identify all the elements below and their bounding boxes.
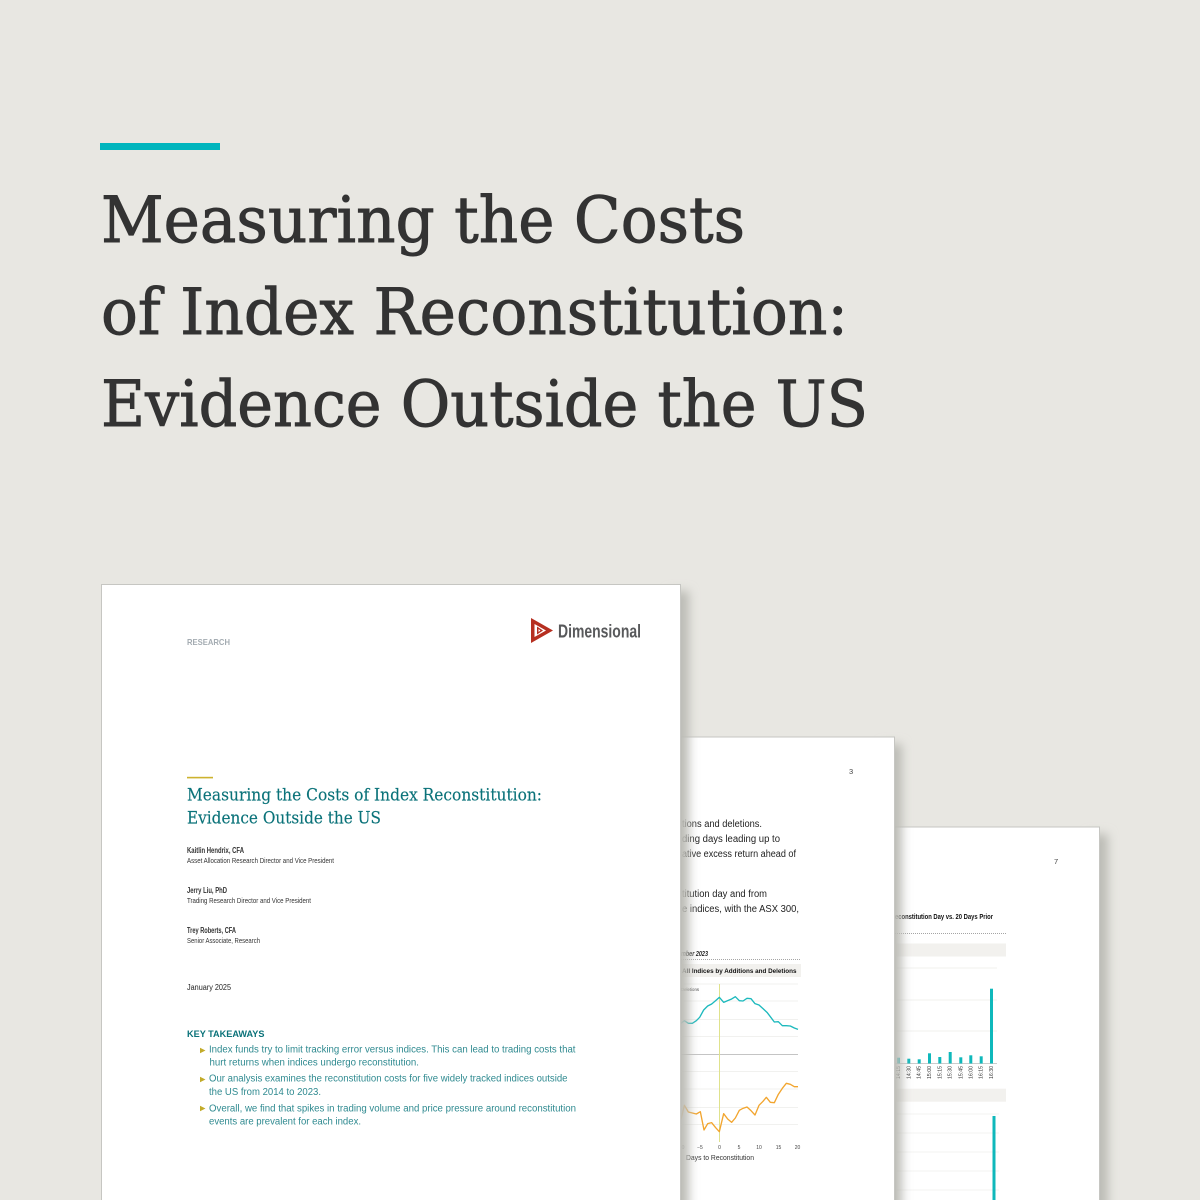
- key takeaways list: Our analysis examines the reconstitution costs for five widely tracked indices outside: [209, 1074, 568, 1084]
- authors: Jerry Liu, PhD: [187, 886, 227, 895]
- title: of Index Reconstitution:: [101, 276, 848, 350]
- section label: RESEARCH: [187, 637, 230, 647]
- key takeaways list: the US from 2014 to 2023.: [209, 1087, 321, 1098]
- body text: e indices, with the ASX 300,: [682, 904, 799, 915]
- line chart: Days to Reconstitution: [686, 1155, 754, 1162]
- line chart: 10: [756, 1145, 762, 1151]
- bar chart: top: 15:00: [927, 1066, 933, 1079]
- bar chart: top: 16:00: [968, 1066, 974, 1079]
- chart subtitle band: [681, 964, 801, 977]
- document title: Measuring the Costs of Index Reconstitution:: [187, 786, 542, 806]
- authors: [187, 846, 335, 945]
- bar chart: top: 14:45: [917, 1066, 923, 1079]
- logo: Dimensional: Dimensional: [558, 622, 641, 642]
- date: January 2025: [187, 983, 231, 992]
- panel: document page 7: [895, 827, 1108, 1200]
- line chart: 0: [682, 1145, 685, 1151]
- line chart: −5: [697, 1145, 703, 1151]
- key takeaways list: Overall, we find that spikes in trading volume and price pressure around reconstitution: [209, 1104, 576, 1114]
- authors: Senior Associate, Research: [187, 936, 260, 945]
- key takeaways heading: KEY TAKEAWAYS: [187, 1029, 264, 1040]
- logo: Dimensional: [531, 618, 641, 643]
- line chart: Deletions: [681, 987, 700, 993]
- body text: titution day and from: [682, 889, 767, 900]
- authors: Kaitlin Hendrix, CFA: [187, 846, 244, 855]
- chart heading: econstitution Day vs. 20 Days Prior: [895, 914, 993, 921]
- title: Evidence Outside the US: [101, 368, 868, 442]
- gold rule: [187, 777, 213, 778]
- panel: document page 3: [681, 737, 902, 1200]
- accent bar: [100, 143, 220, 150]
- chart heading: mber 2023: [681, 951, 708, 958]
- authors: Trading Research Director and Vice President: [187, 896, 312, 905]
- authors: Asset Allocation Research Director and Vice President: [187, 856, 335, 865]
- key takeaways list: [200, 1044, 576, 1128]
- authors: Trey Roberts, CFA: [187, 926, 236, 935]
- document title: [187, 786, 542, 828]
- key takeaways list: hurt returns when indices undergo reconstitution.: [210, 1058, 419, 1068]
- bar chart: bottom: [895, 1089, 1006, 1200]
- title: [101, 184, 868, 442]
- panel: document cover page: [102, 584, 689, 1200]
- bar chart: top: 14:30: [906, 1066, 912, 1079]
- bar chart: top: [895, 944, 1006, 1079]
- page number 7: 7: [1054, 857, 1058, 866]
- key takeaways list: Index funds try to limit tracking error versus indices. This can lead to trading costs that: [209, 1044, 576, 1056]
- chart subtitle band: All Indices by Additions and Deletions: [682, 968, 797, 975]
- bar chart: top: 16:15: [979, 1066, 985, 1079]
- body text: [682, 819, 799, 915]
- bar chart: top: 16:30: [989, 1066, 995, 1079]
- page number 3: 3: [849, 767, 853, 776]
- bar chart: top: 15:15: [937, 1066, 943, 1079]
- title: Measuring the Costs: [101, 184, 745, 258]
- line chart: 0: [718, 1145, 721, 1151]
- line chart: 20: [795, 1145, 800, 1151]
- line chart: 5: [738, 1145, 741, 1151]
- document title: Evidence Outside the US: [187, 808, 381, 828]
- body text: tions and deletions.: [682, 819, 762, 830]
- bar chart: top: 15:45: [958, 1066, 964, 1079]
- bar chart: top: 15:30: [948, 1066, 954, 1079]
- line chart: [681, 984, 800, 1162]
- body text: ative excess return ahead of: [682, 849, 796, 860]
- line chart: 15: [776, 1145, 781, 1151]
- body text: ding days leading up to: [682, 834, 780, 845]
- bar chart: top: 14:15: [896, 1066, 902, 1079]
- key takeaways list: events are prevalent for each index.: [209, 1116, 361, 1128]
